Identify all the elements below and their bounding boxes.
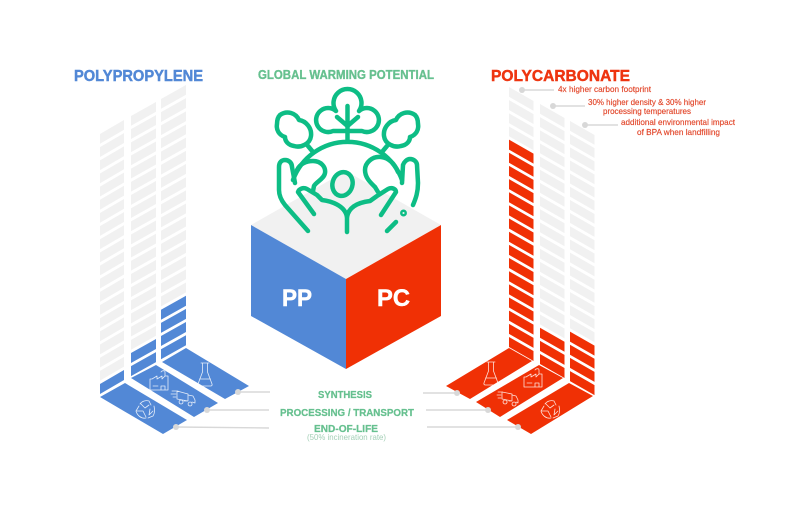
- label: PP: PP: [282, 285, 312, 312]
- connector: synthesis PP: [235, 389, 270, 395]
- floor tiles: polypropylene: [100, 348, 249, 434]
- drop: [330, 170, 355, 198]
- tile: end-of-life PC: [507, 383, 593, 434]
- tile: processing PP: [131, 365, 218, 417]
- connector: processing PP: [204, 407, 269, 413]
- cube top face: [251, 171, 441, 279]
- icon: flask: [198, 363, 212, 386]
- annotation: BPA: [621, 117, 736, 137]
- icon: flask: [484, 362, 498, 385]
- cube: [251, 171, 441, 369]
- column: synthesis PP: [161, 85, 186, 359]
- floor tiles: polycarbonate: [446, 348, 593, 434]
- label: synthesis: SYNTHESIS: [318, 389, 372, 401]
- icon: hands holding planet with trees: [277, 89, 418, 232]
- connector: end-of-life PP: [173, 424, 269, 430]
- left hand: [279, 160, 347, 232]
- column: processing PP: [131, 102, 156, 376]
- icon: factory: [524, 369, 542, 387]
- center tree: [316, 89, 379, 140]
- column: end-of-life PP: [100, 120, 124, 394]
- tile: synthesis PP: [162, 348, 249, 399]
- connector: end-of-life PC: [427, 424, 521, 430]
- icon: truck: [497, 392, 518, 403]
- annotation: BPA: of BPA when landfilling: [637, 127, 720, 137]
- annotation: BPA: additional environmental impact: [621, 117, 736, 127]
- stage labels: [280, 389, 415, 442]
- heading: polycarbonate: POLYCARBONATE: [491, 68, 630, 85]
- chart: polycarbonate stacked columns: [509, 87, 594, 395]
- icon: truck wheels: [179, 400, 192, 406]
- left tree: [277, 113, 313, 152]
- right hand dot: [402, 212, 405, 214]
- annotation: density and temperatures: processing temperatures: [603, 106, 691, 116]
- icon: recycle: [136, 401, 155, 418]
- annotation connector 3: [582, 122, 618, 128]
- icon: truck: [171, 391, 195, 403]
- connector: synthesis PC: [423, 390, 460, 396]
- annotations: polycarbonate: [558, 84, 736, 137]
- connector: processing PC: [426, 407, 491, 413]
- tile: end-of-life PP: [100, 383, 187, 434]
- column: processing PC: [540, 104, 564, 378]
- cube left face: [251, 225, 346, 369]
- connectors: annotation lines: [173, 87, 618, 430]
- annotation: density and temperatures: [588, 97, 706, 116]
- annotation connector 1: [519, 87, 554, 93]
- icon: recycle: [541, 401, 560, 418]
- label: end-of-life: END-OF-LIFE: [314, 423, 378, 435]
- right hand: [347, 159, 418, 231]
- chart: polypropylene stacked columns: [100, 85, 186, 394]
- annotation: density and temperatures: 30% higher density & 30% higher: [588, 97, 706, 107]
- right tree: [382, 113, 418, 152]
- column: end-of-life PC: [570, 121, 594, 395]
- white tile icons: polycarbonate: [484, 362, 560, 418]
- globe: [293, 142, 402, 180]
- annotation connector 2: [550, 103, 585, 109]
- icon: factory: [150, 371, 168, 390]
- tile: synthesis PC: [446, 348, 532, 399]
- icon: truck wheels: [503, 400, 516, 406]
- annotation: carbon footprint: 4x higher carbon footprint: [558, 84, 652, 94]
- cube right face: [346, 225, 441, 369]
- heading: polypropylene: POLYPROPYLENE: [74, 68, 203, 85]
- label: incineration rate: (50% incineration rate): [307, 432, 386, 442]
- label: processing / transport: PROCESSING / TRANSPORT: [280, 407, 415, 419]
- white tile icons: polypropylene: [136, 363, 212, 418]
- column: synthesis PC: [509, 87, 534, 361]
- label: PC: PC: [377, 285, 410, 312]
- continents: [297, 157, 398, 192]
- heading: global warming potential: GLOBAL WARMING POTENTIAL: [258, 68, 434, 82]
- tile: processing PC: [476, 365, 563, 417]
